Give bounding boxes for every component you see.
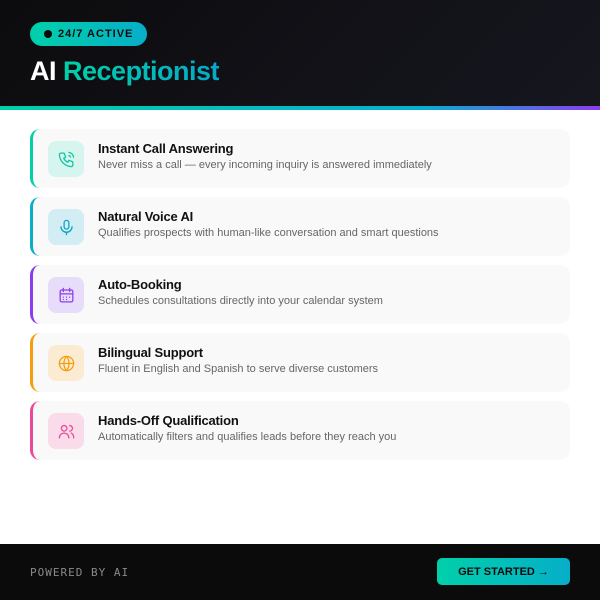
- icon: users: [48, 413, 84, 449]
- card: instant call answering: Instant Call Answering: [98, 141, 233, 156]
- header: [0, 0, 600, 106]
- footer: [0, 544, 600, 600]
- icon: calendar: [48, 277, 84, 313]
- button: GET STARTED →: [458, 566, 549, 578]
- icon: phone: [48, 141, 84, 177]
- badge: 24/7 ACTIVE: [58, 28, 133, 40]
- card: natural voice ai: [30, 197, 570, 256]
- card: auto-booking: Schedules consultations directly into your calendar system: [98, 295, 383, 307]
- card: bilingual support: Fluent in English and Spanish to serve diverse customers: [98, 363, 378, 375]
- icon: microphone: [48, 209, 84, 245]
- badge: [30, 22, 147, 46]
- card: bilingual support: Bilingual Support: [98, 345, 203, 360]
- card: bilingual support: [30, 333, 570, 392]
- card: natural voice ai: Natural Voice AI: [98, 209, 193, 224]
- title: AI Receptionist: [30, 56, 219, 86]
- icon: globe: [48, 345, 84, 381]
- card: natural voice ai: Qualifies prospects with human-like conversation and smart questions: [98, 227, 439, 239]
- powered by: POWERED BY AI: [30, 566, 129, 579]
- card: hands-off qualification: Automatically filters and qualifies leads before they reach you: [98, 431, 396, 443]
- card: instant call answering: [30, 129, 570, 188]
- button: [437, 558, 570, 585]
- card: hands-off qualification: [30, 401, 570, 460]
- card: instant call answering: Never miss a call — every incoming inquiry is answered immediately: [98, 159, 432, 171]
- card: auto-booking: Auto-Booking: [98, 277, 182, 292]
- card: auto-booking: [30, 265, 570, 324]
- card: hands-off qualification: Hands-Off Qualification: [98, 413, 239, 428]
